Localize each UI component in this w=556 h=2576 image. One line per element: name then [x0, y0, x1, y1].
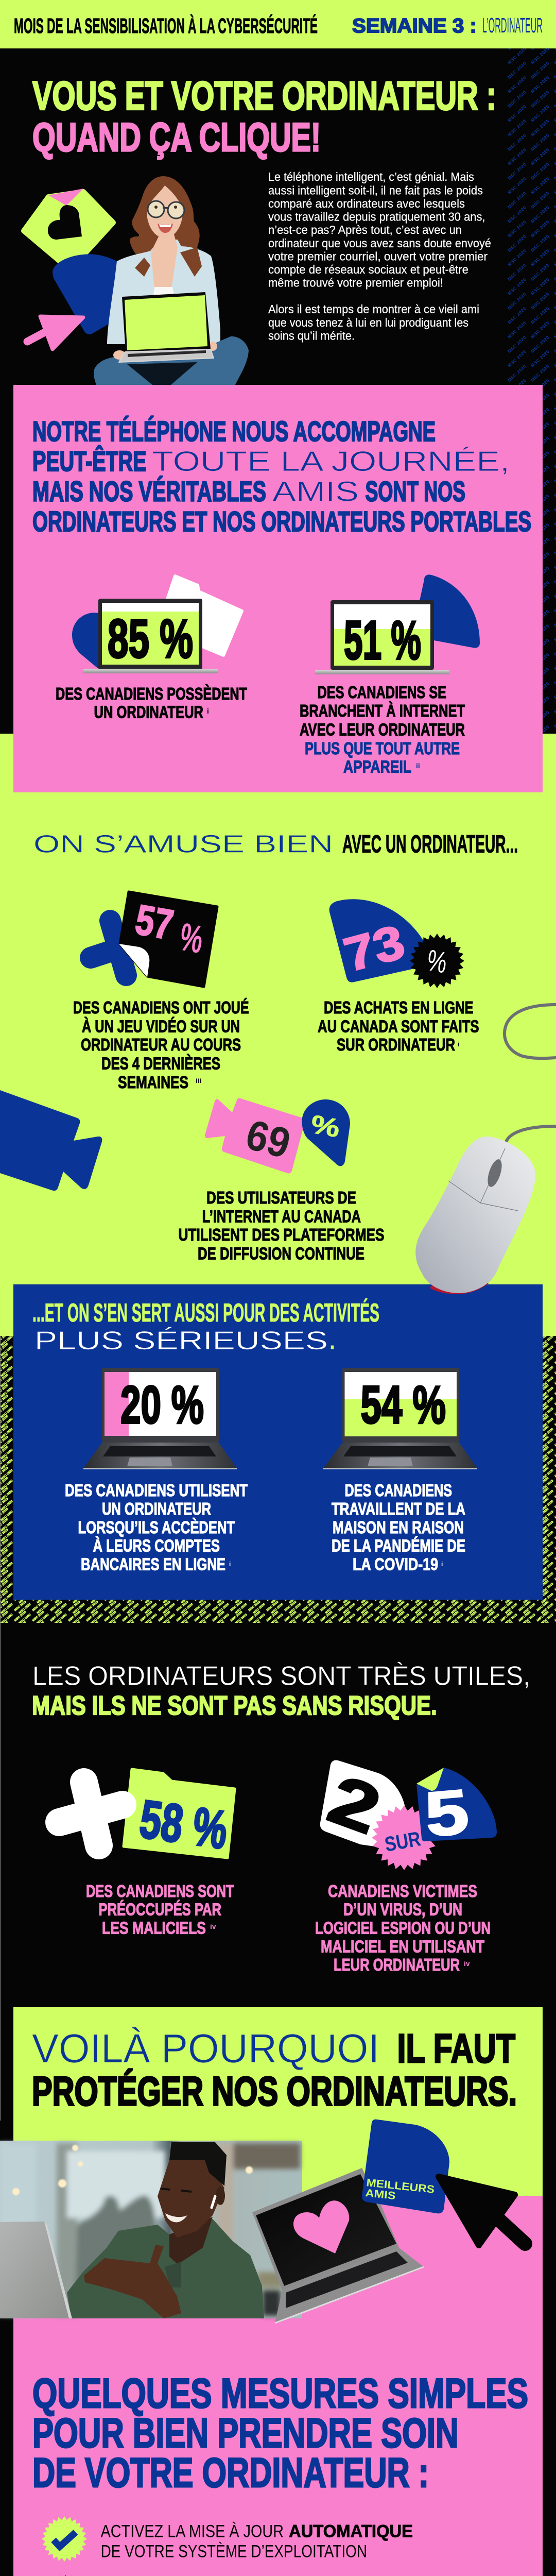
- heading: IL FAUT: [397, 2025, 515, 2071]
- intro text: vous travaillez depuis pratiquement 30 ans,: [268, 210, 485, 224]
- tip 1: ACTIVEZ LA MISE À JOUR: [101, 2522, 284, 2541]
- heading: PEUT-ÊTRE: [32, 445, 146, 477]
- caption: 2 out of 5: CANADIENS VICTIMES: [328, 1882, 477, 1901]
- caption: 73 percent: [318, 998, 479, 1054]
- caption: 58 percent: [86, 1882, 234, 1937]
- caption: 20 percent: BANCAIRES EN LIGNE: [81, 1555, 225, 1574]
- caption: 58 percent: PRÉOCCUPÉS PAR: [99, 1900, 221, 1919]
- intro text: Le téléphone intelligent, c’est génial. Mais: [268, 170, 474, 183]
- caption: 69 percent: DE DIFFUSION CONTINUE: [198, 1244, 364, 1263]
- stat: 73 percent: [329, 899, 464, 988]
- heading: .: [329, 1326, 335, 1355]
- heading: VOILÀ POURQUOI: [32, 2025, 379, 2071]
- heading: useful but risky: LES ORDINATEURS SONT TRÈS UTILES,: [32, 1661, 530, 1691]
- panel: serious uses: [13, 1284, 543, 1600]
- stat: 57 percent: [91, 892, 217, 987]
- caption: 69 percent: UTILISENT DES PLATEFORMES: [178, 1225, 384, 1244]
- icon: blue best friends card: AMIS: [364, 2187, 396, 2202]
- stat: 54 percent laptop: 54 %: [360, 1375, 446, 1434]
- caption: 58 percent: iv: [210, 1922, 216, 1930]
- heading: [32, 415, 531, 537]
- caption: 58 percent: LES MALICIELS: [102, 1919, 206, 1937]
- icon: blue check badge: [43, 2575, 88, 2576]
- icon: black cursor arrow: [439, 2177, 525, 2245]
- mouse cable loop: [505, 1005, 556, 1058]
- heading: MAIS NOS VÉRITABLES: [32, 475, 266, 507]
- tip 1: DE VOTRE SYSTÈME D’EXPLOITATION: [101, 2542, 367, 2562]
- caption: 57 percent: SEMAINES: [118, 1073, 188, 1092]
- stat: 69 percent: [205, 1098, 350, 1173]
- stat: 2 out of 5: 2: [319, 1761, 390, 1848]
- header band: [0, 0, 556, 48]
- caption: 73 percent: SUR ORDINATEUR: [337, 1035, 455, 1054]
- caption: 54 percent: LA COVID-19: [353, 1555, 438, 1574]
- image: computer mouse: [415, 1126, 556, 1294]
- caption: 54 percent: MAISON EN RAISON: [333, 1518, 464, 1537]
- caption: 2 out of 5: LOGICIEL ESPION OU D’UN: [315, 1919, 491, 1937]
- stat: 57 percent: 57: [132, 896, 177, 949]
- photo: smiling man at laptop: [0, 2141, 302, 2318]
- caption: 20 percent: [65, 1481, 248, 1574]
- caption: 51 percent: DES CANADIENS SE: [317, 683, 446, 702]
- stat: 58 percent folder: 58 %: [136, 1789, 231, 1860]
- caption: 20 percent: DES CANADIENS UTILISENT: [65, 1481, 248, 1500]
- stat: 73 percent: 73: [339, 916, 410, 981]
- stat: 20 percent laptop: [83, 1368, 237, 1469]
- heading: simple measures: [32, 2370, 528, 2496]
- caption: 85 percent: i: [207, 707, 209, 715]
- photo: woman holding laptop: [94, 176, 249, 385]
- intro text: Alors il est temps de montrer à ce vieil ami: [268, 302, 479, 316]
- stat: 51 percent laptop: [315, 574, 480, 674]
- caption: 73 percent: AU CANADA SONT FAITS: [318, 1017, 479, 1036]
- heading: SONT NOS: [366, 475, 465, 507]
- intro text: ordinateur que vous avez sans doute envoyé: [268, 236, 491, 250]
- stat: 57 percent: %: [177, 915, 206, 962]
- caption: 73 percent: DES ACHATS EN LIGNE: [324, 998, 474, 1017]
- title: [32, 73, 496, 160]
- heading: simple measures: DE VOTRE ORDINATEUR :: [32, 2450, 429, 2496]
- intro text: même trouvé votre premier emploi!: [268, 276, 443, 290]
- intro text: [268, 170, 491, 342]
- heading: [32, 1298, 379, 1355]
- caption: 57 percent: ORDINATEUR AU COURS: [81, 1035, 241, 1054]
- caption: 2 out of 5: [315, 1882, 491, 1974]
- caption: 85 percent: DES CANADIENS POSSÈDENT: [56, 684, 247, 703]
- icon: blue best friends card: [362, 2120, 449, 2213]
- caption: 2 out of 5: MALICIEL EN UTILISANT: [321, 1937, 484, 1956]
- stat: 2 out of 5: SUR: [383, 1827, 423, 1856]
- icon: blue video camera: [0, 1090, 102, 1191]
- intro text: que vous tenez à lui en lui prodiguant les: [268, 316, 468, 329]
- caption: 2 out of 5: D’UN VIRUS, D’UN: [343, 1900, 462, 1919]
- intro text: aussi intelligent soit-il, il ne fait pas le poids: [268, 183, 483, 197]
- heading: AMIS: [272, 475, 359, 507]
- caption: 20 percent: LORSQU’ILS ACCÈDENT: [78, 1518, 235, 1537]
- panel: why protect computers: [0, 2007, 543, 2576]
- caption: 54 percent: TRAVAILLENT DE LA: [332, 1499, 465, 1518]
- intro text: soins qu’il mérite.: [268, 329, 355, 342]
- caption: 57 percent: iii: [196, 1076, 202, 1084]
- caption: 57 percent: DES 4 DERNIÈRES: [101, 1054, 220, 1073]
- heading: fun with computers: [33, 831, 518, 858]
- tip 1: AUTOMATIQUE: [289, 2522, 413, 2541]
- caption: 69 percent: L’INTERNET AU CANADA: [202, 1207, 361, 1226]
- icon: blue shape: [53, 254, 121, 334]
- caption: 20 percent: À LEURS COMPTES: [93, 1536, 220, 1555]
- icon: pink cursor arrow: [27, 316, 83, 349]
- caption: 54 percent: DE LA PANDÉMIE DE: [332, 1536, 465, 1555]
- caption: 51 percent: [300, 683, 465, 776]
- stat: 85 percent laptop: [72, 576, 242, 673]
- caption: 69 percent: DES UTILISATEURS DE: [206, 1188, 356, 1207]
- caption: 51 percent: AVEC LEUR ORDINATEUR: [300, 720, 465, 739]
- stat: 69 percent: 69: [241, 1111, 295, 1167]
- heading: [32, 2025, 517, 2114]
- caption: 54 percent: DES CANADIENS: [345, 1481, 452, 1500]
- caption: 85 percent: UN ORDINATEUR: [94, 703, 203, 721]
- heading: PLUS SÉRIEUSES: [34, 1326, 328, 1355]
- caption: 57 percent: À UN JEU VIDÉO SUR UN: [82, 1017, 240, 1036]
- intro text: compte de réseaux sociaux et peut-être: [268, 263, 468, 276]
- intro text: n’est-ce pas? Après tout, c’est avec un: [268, 223, 462, 236]
- caption: 57 percent: DES CANADIENS ONT JOUÉ: [73, 998, 249, 1017]
- caption: 2 out of 5: iv: [464, 1959, 470, 1968]
- stat: 2 out of 5: 5: [422, 1776, 472, 1850]
- stat: 58 percent folder: [59, 1769, 235, 1860]
- stat: 85 percent laptop: 85 %: [108, 608, 193, 669]
- caption: 85 percent: [56, 684, 247, 721]
- header: week label: SEMAINE 3 :: [352, 15, 477, 37]
- caption: 58 percent: DES CANADIENS SONT: [86, 1882, 234, 1901]
- heading: useful but risky: [32, 1661, 530, 1721]
- illustration: tilted laptop with heart: [252, 2168, 424, 2323]
- heading: useful but risky: MAIS ILS NE SONT PAS SANS RISQUE.: [32, 1691, 437, 1721]
- caption: 20 percent: UN ORDINATEUR: [102, 1499, 211, 1518]
- heading: fun with computers: ON S’AMUSE BIEN: [33, 831, 333, 858]
- caption: 73 percent: i: [458, 1041, 459, 1048]
- caption: 20 percent: i: [229, 1561, 231, 1568]
- caption: 54 percent: i: [441, 1561, 443, 1568]
- title: QUAND ÇA CLIQUE!: [32, 114, 321, 160]
- caption: 51 percent: BRANCHENT À INTERNET: [300, 701, 465, 720]
- stat: 69 percent: %: [309, 1110, 342, 1143]
- intro text: comparé aux ordinateurs avec lesquels: [268, 197, 465, 210]
- caption: 54 percent: [332, 1481, 465, 1574]
- stat: 54 percent laptop: [323, 1368, 477, 1469]
- stat: 20 percent laptop: 20 %: [120, 1375, 204, 1434]
- stat: 51 percent laptop: 51 %: [344, 610, 421, 671]
- caption: 51 percent: ii: [416, 761, 420, 770]
- icon: lime check badge: [42, 2516, 87, 2562]
- tip 1: [101, 2522, 413, 2562]
- icon: blue best friends card: MEILLEURS: [366, 2177, 435, 2196]
- header: campaign name: MOIS DE LA SENSIBILISATION À LA CYBERSÉCURITÉ: [14, 14, 318, 38]
- caption: 51 percent: APPAREIL: [343, 757, 411, 776]
- intro text: votre premier courriel, ouvert votre premier: [268, 250, 488, 263]
- illustration: shapes and woman with laptop: [24, 176, 249, 385]
- panel: phone versus computer: [13, 385, 543, 792]
- caption: 51 percent: PLUS QUE TOUT AUTRE: [305, 739, 460, 758]
- stat: 73 percent: %: [425, 943, 449, 980]
- caption: 2 out of 5: LEUR ORDINATEUR: [334, 1955, 460, 1974]
- caption: 69 percent: [178, 1188, 384, 1263]
- icon: lime shape with heart: [24, 189, 113, 270]
- stat: 2 out of 5: [319, 1760, 497, 1870]
- caption: 57 percent: [73, 998, 249, 1092]
- heading: TOUTE LA JOURNÉE,: [152, 445, 510, 477]
